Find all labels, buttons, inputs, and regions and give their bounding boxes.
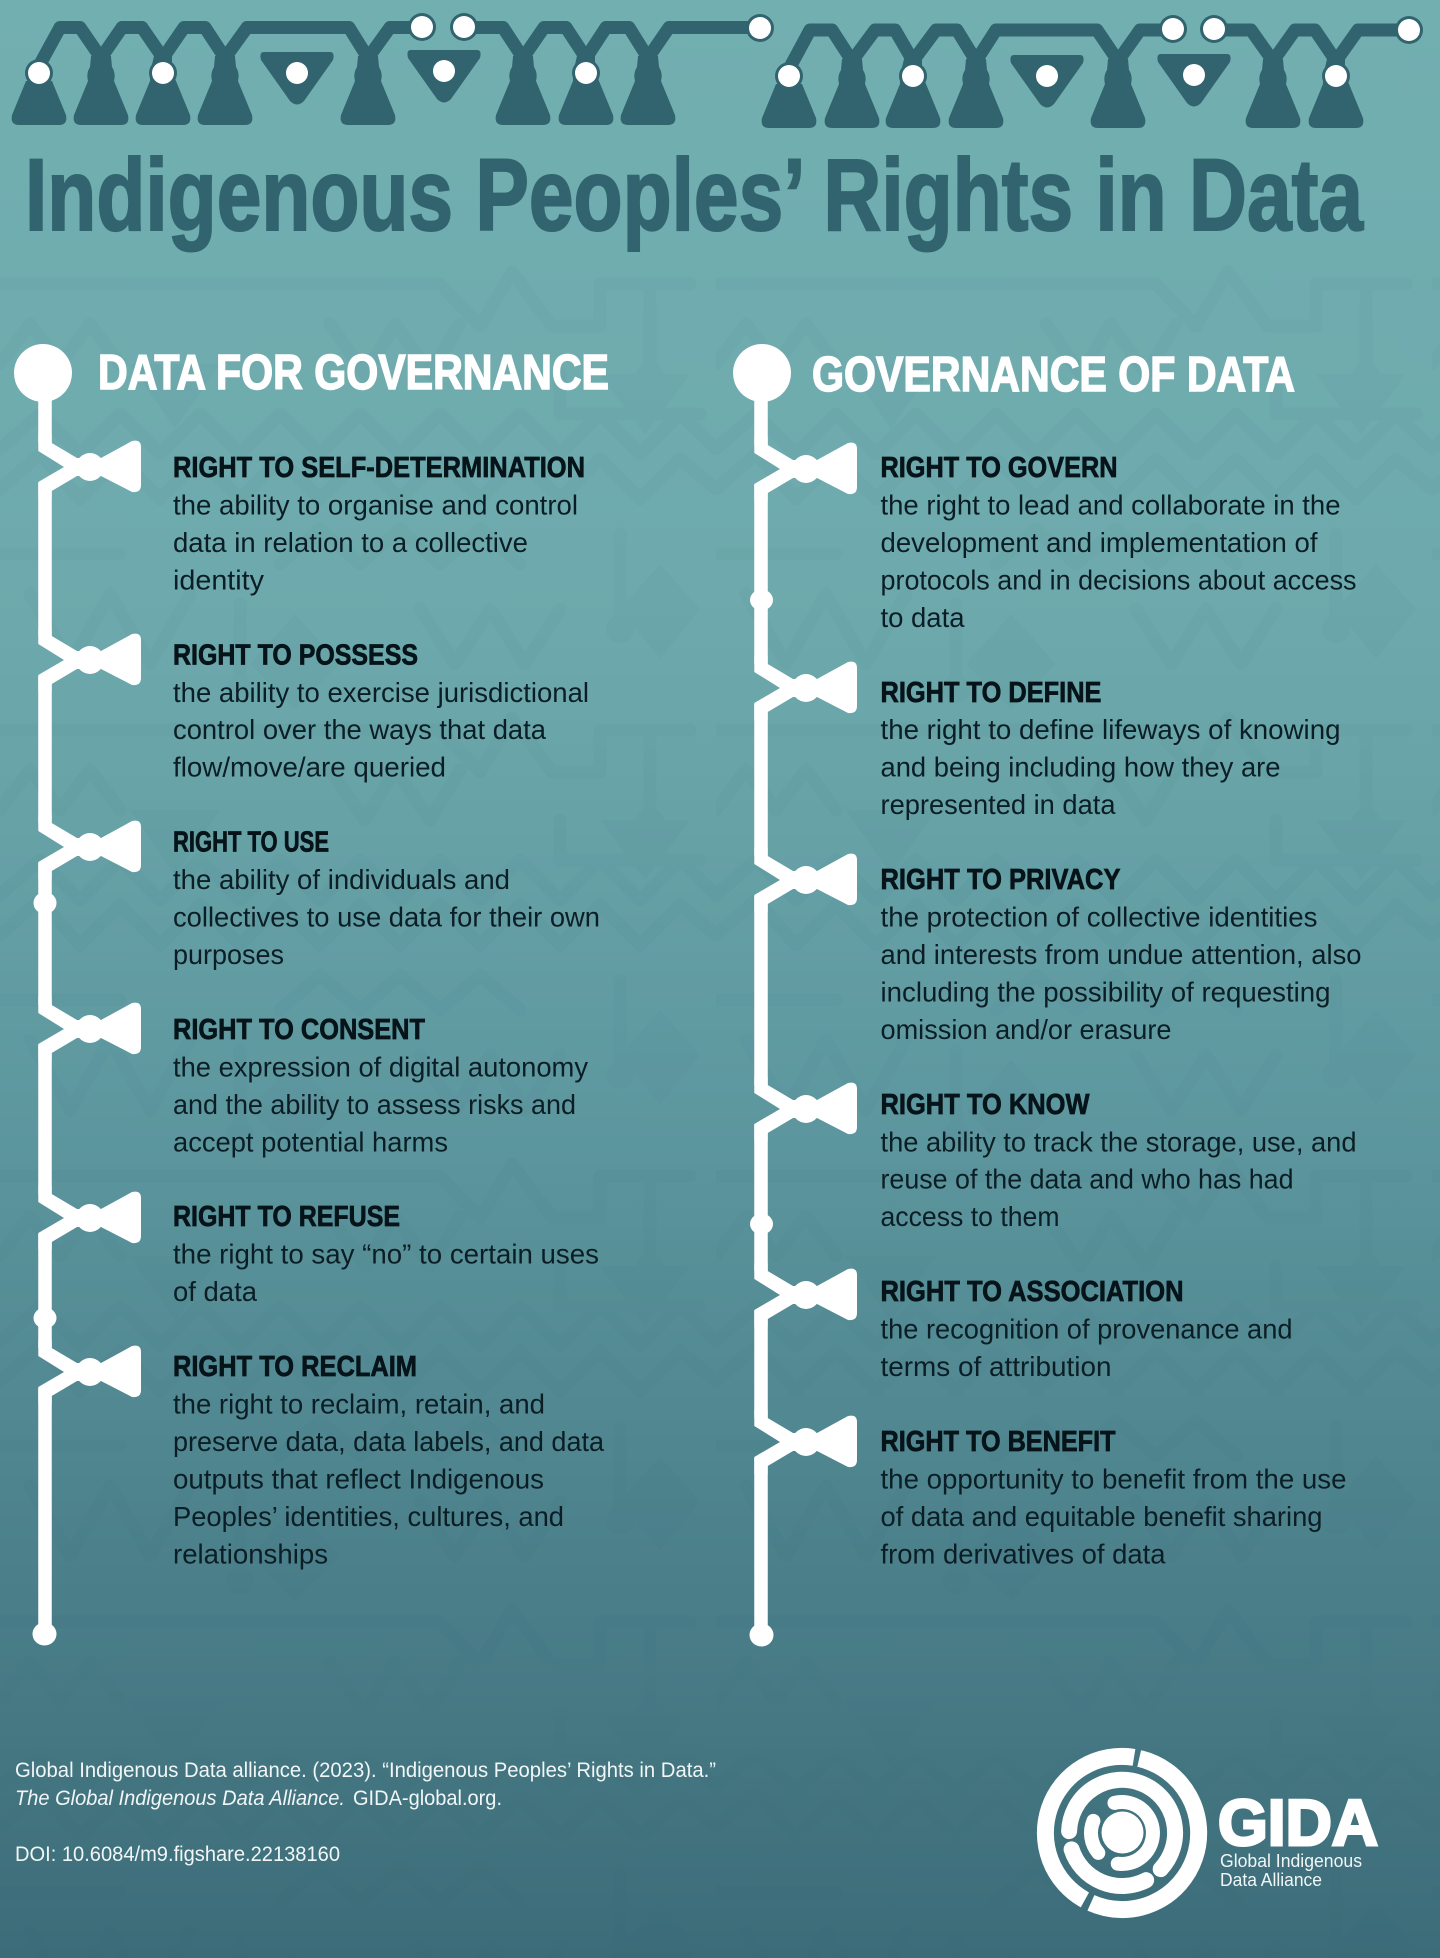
right to reclaim: relationships (173, 1538, 328, 1569)
top woven motif, left (12, 13, 774, 125)
right to self-determination: data in relation to a collective (173, 527, 528, 558)
right to consent: and the ability to assess risks and (173, 1089, 576, 1120)
right to consent: the expression of digital autonomy (173, 1051, 588, 1082)
logo wordmark: GIDA (1218, 1786, 1378, 1859)
right to refuse: of data (173, 1276, 257, 1307)
right to use: collectives to use data for their own (173, 902, 600, 932)
right to self-determination (173, 452, 585, 595)
right to govern: to data (880, 602, 965, 633)
right to govern: RIGHT TO GOVERN (880, 452, 1118, 484)
timeline: right (733, 344, 857, 1646)
logo tagline (1220, 1851, 1362, 1890)
right to refuse: the right to say “no” to certain uses (173, 1239, 599, 1270)
right to self-determination: RIGHT TO SELF-DETERMINATION (173, 452, 585, 484)
citation footer: Global Indigenous Data alliance. (2023). “Indigenous Peoples’ Rights in Data.” (15, 1759, 716, 1782)
right to benefit: from derivatives of data (880, 1538, 1166, 1569)
right to possess (173, 639, 589, 783)
right to association (880, 1276, 1292, 1382)
right to define: and being including how they are (880, 752, 1280, 783)
right to privacy: omission and/or erasure (880, 1014, 1172, 1045)
right to reclaim (173, 1351, 604, 1569)
right to association: terms of attribution (880, 1351, 1112, 1382)
logo tagline: Data Alliance (1220, 1870, 1322, 1890)
right to use: purposes (173, 939, 284, 970)
logo tagline: Global Indigenous (1220, 1851, 1362, 1871)
citation footer (15, 1759, 716, 1866)
right to know (880, 1089, 1356, 1232)
right to govern: development and implementation of (880, 527, 1318, 558)
right to define: the right to define lifeways of knowing (880, 714, 1340, 745)
right to benefit: of data and equitable benefit sharing (880, 1501, 1322, 1532)
right to define: represented in data (880, 789, 1116, 820)
right to benefit: RIGHT TO BENEFIT (880, 1426, 1116, 1458)
heading: data for governance: DATA FOR GOVERNANCE (98, 346, 609, 400)
right to possess: control over the ways that data (173, 714, 546, 745)
right to association: RIGHT TO ASSOCIATION (880, 1276, 1184, 1308)
right to govern (880, 452, 1356, 633)
right to define: RIGHT TO DEFINE (880, 677, 1102, 709)
right to consent: accept potential harms (173, 1126, 448, 1157)
right to association: the recognition of provenance and (880, 1314, 1292, 1345)
right to reclaim: RIGHT TO RECLAIM (173, 1351, 417, 1383)
right to know: RIGHT TO KNOW (880, 1089, 1090, 1121)
citation footer: The Global Indigenous Data Alliance. (15, 1787, 345, 1810)
right to self-determination: the ability to organise and control (173, 490, 578, 520)
icon: concentric rings (1045, 1756, 1199, 1910)
timeline: left (14, 344, 141, 1646)
right to refuse (173, 1201, 599, 1307)
right to use: RIGHT TO USE (173, 827, 329, 859)
right to benefit: the opportunity to benefit from the use (880, 1463, 1346, 1494)
top woven motif, right (762, 15, 1423, 128)
right to benefit (880, 1426, 1346, 1569)
right to reclaim: the right to reclaim, retain, and (173, 1388, 545, 1420)
citation footer: GIDA-global.org. (353, 1787, 502, 1810)
right to consent: RIGHT TO CONSENT (173, 1014, 425, 1046)
citation footer: DOI: 10.6084/m9.figshare.22138160 (15, 1843, 340, 1866)
right to self-determination: identity (173, 564, 264, 595)
heading: governance of data: GOVERNANCE OF DATA (812, 348, 1295, 402)
right to know: reuse of the data and who has had (880, 1164, 1294, 1195)
right to reclaim: Peoples’ identities, cultures, and (173, 1501, 564, 1532)
panel: governance of data (733, 344, 1362, 1646)
right to define (880, 677, 1340, 820)
right to privacy: the protection of collective identities (880, 902, 1318, 932)
panel: data for governance (14, 344, 609, 1646)
right to reclaim: preserve data, data labels, and data (173, 1426, 604, 1457)
right to govern: protocols and in decisions about access (880, 564, 1356, 595)
right to use: the ability of individuals and (173, 864, 510, 895)
right to privacy: including the possibility of requesting (880, 976, 1330, 1007)
right to know: access to them (880, 1201, 1060, 1232)
right to possess: flow/move/are queried (173, 752, 446, 783)
right to consent (173, 1014, 588, 1157)
right to privacy (880, 864, 1362, 1045)
right to possess: RIGHT TO POSSESS (173, 639, 418, 671)
right to reclaim: outputs that reflect Indigenous (173, 1463, 544, 1494)
right to know: the ability to track the storage, use, and (880, 1126, 1356, 1157)
right to privacy: RIGHT TO PRIVACY (880, 864, 1120, 896)
logo: GIDA (1045, 1756, 1378, 1910)
right to govern: the right to lead and collaborate in the (880, 490, 1340, 520)
right to use (173, 827, 600, 970)
right to possess: the ability to exercise jurisdictional (173, 677, 589, 708)
right to refuse: RIGHT TO REFUSE (173, 1201, 400, 1233)
right to privacy: and interests from undue attention, also (880, 939, 1362, 970)
